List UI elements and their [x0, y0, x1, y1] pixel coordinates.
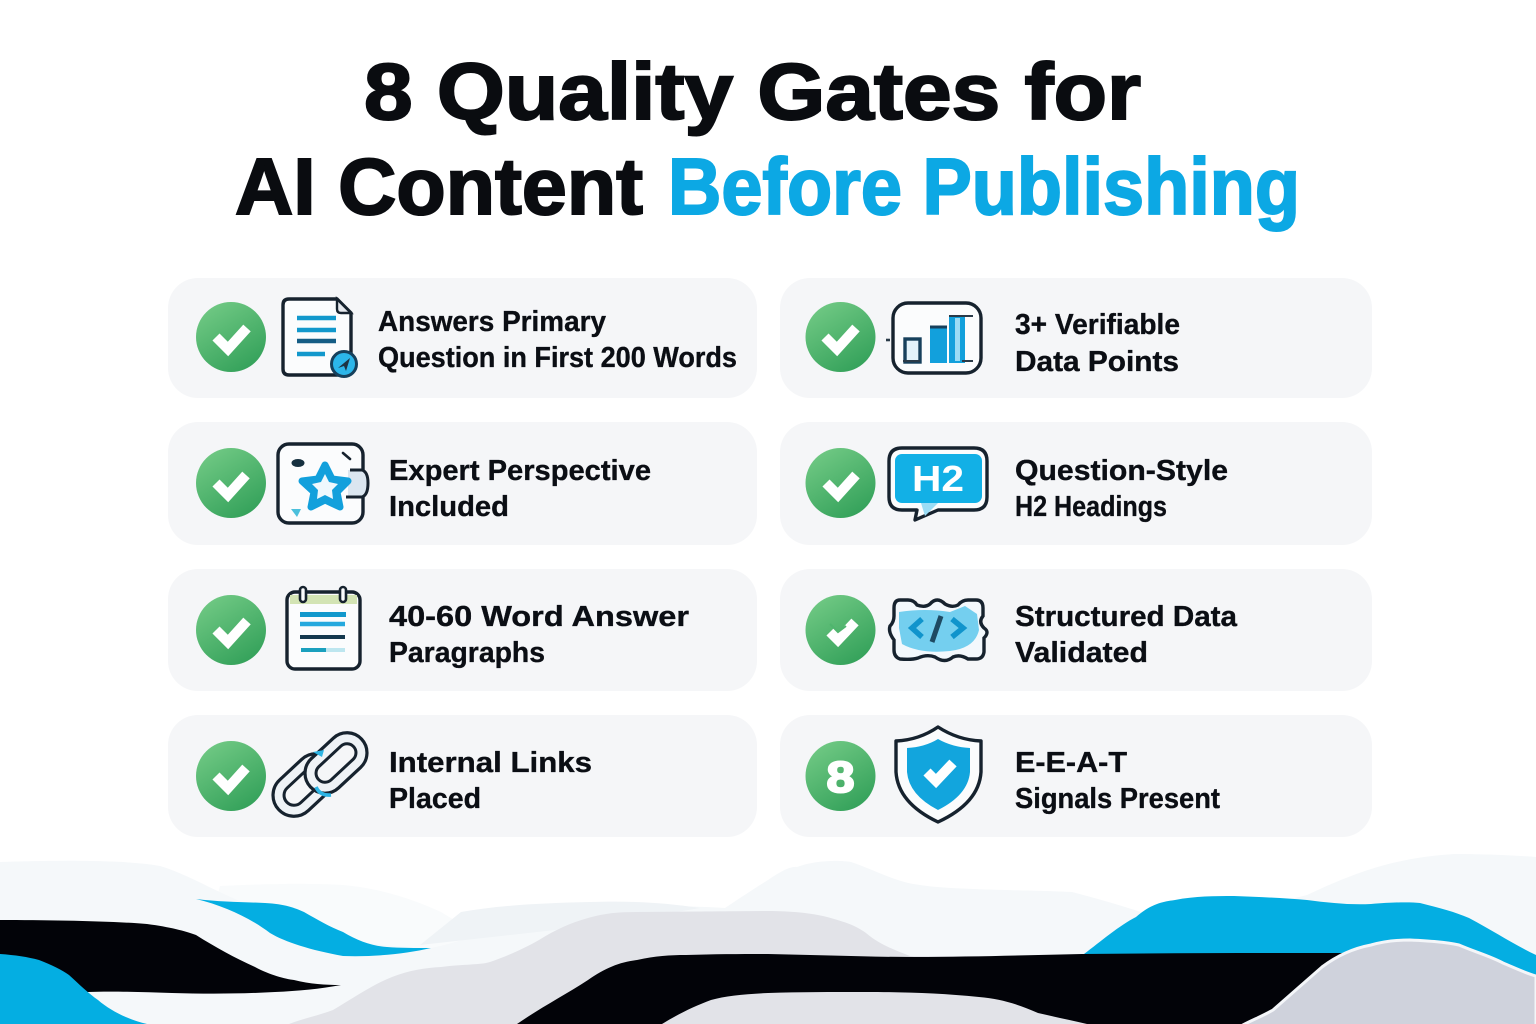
label	[1015, 309, 1180, 378]
panel: e-e-a-t signals present	[780, 715, 1372, 837]
title: Before Publishing	[668, 142, 1300, 231]
panel: verifiable data points	[780, 278, 1372, 398]
icon: document with badge	[283, 299, 356, 376]
check badge	[806, 595, 876, 665]
label: Question in First 200 Words	[378, 342, 737, 374]
icon: H2 speech bubble: H2	[912, 458, 964, 499]
label: Paragraphs	[389, 637, 545, 669]
label: 3+ Verifiable	[1015, 309, 1180, 341]
check badge	[196, 302, 266, 372]
title: 8 Quality Gates for	[364, 47, 1141, 136]
label: Internal Links	[389, 747, 592, 779]
label: Structured Data	[1015, 601, 1238, 633]
icon: chain link	[264, 725, 375, 825]
title	[235, 47, 1300, 231]
label: Data Points	[1015, 346, 1179, 378]
label: H2 Headings	[1015, 491, 1167, 523]
label: Included	[389, 491, 509, 523]
decorative bottom waves	[0, 854, 1536, 1024]
label	[389, 601, 689, 669]
label: Answers Primary	[378, 306, 606, 338]
label: Validated	[1015, 637, 1148, 669]
label	[389, 455, 651, 523]
label	[1015, 747, 1220, 815]
check badge	[806, 302, 876, 372]
icon: shield with check	[896, 727, 981, 822]
icon: notepad	[287, 587, 360, 669]
label: Question-Style	[1015, 455, 1228, 487]
icon: bar chart	[886, 303, 981, 373]
label: Signals Present	[1015, 783, 1220, 815]
icon: star card	[278, 444, 368, 523]
check badge	[196, 741, 266, 811]
check badge	[196, 595, 266, 665]
label	[389, 747, 592, 815]
label	[1015, 455, 1228, 523]
label: 40-60 Word Answer	[389, 601, 689, 633]
number badge	[806, 741, 876, 811]
label: Placed	[389, 783, 481, 815]
title: AI Content	[235, 142, 643, 231]
panel: answers primary question	[168, 278, 757, 398]
label: E-E-A-T	[1015, 747, 1128, 779]
label: Expert Perspective	[389, 455, 651, 487]
check badge	[806, 448, 876, 518]
label	[378, 306, 737, 374]
panel: expert perspective	[168, 422, 757, 545]
panel: structured data validated	[780, 569, 1372, 691]
panel: question-style h2 headings	[780, 422, 1372, 545]
icon: H2 speech bubble	[889, 448, 987, 520]
number badge: 8	[826, 753, 854, 802]
label	[1015, 601, 1238, 669]
panel: internal links placed	[168, 715, 757, 837]
panel: 40-60 word answer paragraphs	[168, 569, 757, 691]
icon: code tag	[890, 600, 987, 660]
check badge	[196, 448, 266, 518]
